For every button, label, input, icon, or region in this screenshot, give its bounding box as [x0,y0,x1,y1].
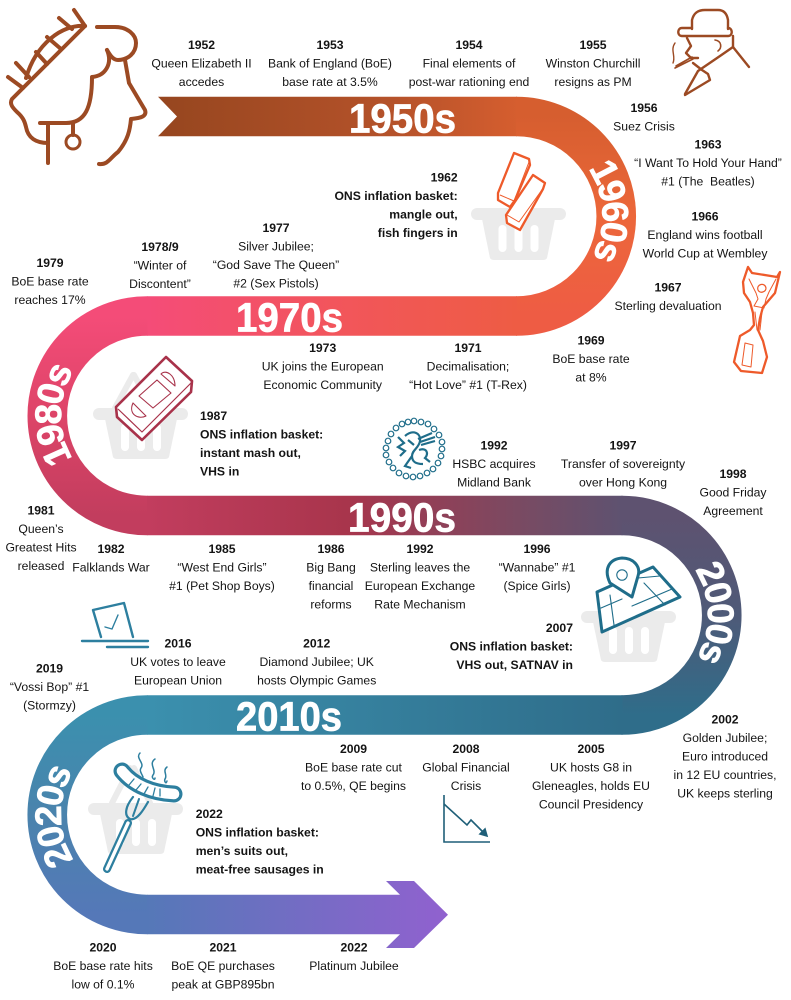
text: 1986: financial [309,579,353,593]
text: 1979: reaches 17% [14,293,86,307]
text: 1966: England wins football [647,228,763,242]
heading: 2010s: 2010s [236,694,342,740]
icon: VHS tape [116,357,192,440]
ribbon: 2000s curve [622,516,722,715]
text: 1981: released [18,559,64,573]
icon: steam [139,753,167,783]
text: 1987 basket note: 1987 [200,409,227,423]
text: 1985: #1 (Pet Shop Boys) [169,579,275,593]
text: 1969: BoE base rate [552,352,630,366]
text: 1997: over Hong Kong [579,476,667,490]
text: 1996: (Spice Girls) [503,579,571,593]
icon: sausage [122,771,174,796]
text: 2020: low of 0.1% [71,978,135,992]
text: 2021: peak at GBP895bn [172,978,274,992]
text: 1986: reforms [310,598,352,612]
icon: basket [471,208,566,260]
text: 1982: 1982 [97,542,125,556]
text: 1952: Queen Elizabeth II [151,57,252,71]
text: 1985: “West End Girls” [177,560,267,574]
text: 2016: European Union [134,674,222,688]
text: 1962 basket note: fish fingers in [378,226,458,240]
text: 1992 HSBC: HSBC acquires [452,457,536,471]
text: 1955: Winston Churchill [546,57,640,71]
text: 1955: resigns as PM [554,75,632,89]
text: 1963: 1963 [694,138,722,152]
text: 2022 basket note: ONS inflation basket: [196,826,319,840]
text: 2021: 2021 [209,941,237,955]
icon: basket [93,375,188,459]
text: 1952: 1952 [188,38,215,52]
heading: 1960s: 1960s [589,160,629,262]
text: 1978/9: “Winter of [134,258,187,272]
heading: 1980s: 1980s [34,364,72,466]
text: 1977: “God Save The Queen” [213,258,339,272]
text: 1955: 1955 [579,38,607,52]
text: 2022 Platinum Jubilee: Platinum Jubilee [309,959,399,973]
text: 1978/9: Discontent” [129,277,191,291]
text: 2002: UK keeps sterling [677,786,773,800]
text: 2005: UK hosts G8 in [550,760,632,774]
text: 1969: 1969 [577,334,605,348]
text: 1963: “I Want To Hold Your Hand” [634,156,782,170]
text: 2007 basket note: 2007 [546,621,573,635]
text: 1986: Big Bang [306,560,356,574]
text: 1962 basket note: mangle out, [389,208,458,222]
text: 1962 basket note: 1962 [431,171,458,185]
ribbon: 2020s curve [47,715,148,915]
text: 1966: 1966 [691,210,719,224]
text: 2009: to 0.5%, QE begins [301,779,406,793]
text: 1967: 1967 [654,280,682,294]
icon: ballot box [82,603,148,647]
text: 1962 basket note: ONS inflation basket: [334,189,458,203]
text: 1996: “Wannabe” #1 [499,560,576,574]
icon: Winston Churchill [673,10,749,95]
text: 2005: Council Presidency [539,798,644,812]
text: 1992 ERM: 1992 [406,542,434,556]
icon: World Cup trophy [734,267,780,373]
text: 1977: Silver Jubilee; [238,240,314,254]
ribbon: 1990s band [147,496,622,535]
text: 1997: 1997 [609,438,637,452]
text: 1954: Final elements of [423,57,516,71]
ribbon: 1980s curve [47,316,148,516]
text: 1953: base rate at 3.5% [282,75,378,89]
text: 1971: Decimalisation; [427,360,509,374]
text: 1973: Economic Community [263,378,383,392]
text: 1971: “Hot Love” #1 (T-Rex) [409,378,527,392]
text: 1981: Greatest Hits [5,541,77,555]
ribbon: winding decade timeline [47,97,722,948]
icon: basket with satnav map [581,558,680,662]
text: 1963: #1 (The Beatles) [661,174,755,188]
text: 1992 HSBC: 1992 [480,438,508,452]
text: 2002: Euro introduced [682,749,768,763]
text: 1954: 1954 [455,38,483,52]
text: 1998: Good Friday [699,486,767,500]
icon: basket [581,611,676,662]
text: 1987 basket note: instant mash out, [200,446,301,460]
text: 1987 basket note: VHS in [200,464,239,478]
text: 1978/9: 1978/9 [141,240,179,254]
text: 1982: Falklands War [72,560,150,574]
text: 1992 ERM: Sterling leaves the [370,560,470,574]
text: 1992 ERM: Rate Mechanism [374,598,466,612]
text: 1973: 1973 [309,341,336,355]
text: 2019: “Vossi Bop” #1 [10,680,89,694]
text: 1973: UK joins the European [262,360,384,374]
text: 2007 basket note: VHS out, SATNAV in [456,658,573,672]
text: 2016: UK votes to leave [130,655,226,669]
icon: fork [107,797,148,869]
text: 1966: World Cup at Wembley [643,246,768,260]
icon: HSBC griffin seal [383,418,445,480]
icon: basket with VHS tape [93,357,192,459]
text: 2012: Diamond Jubilee; UK [259,655,374,669]
text: 1956: 1956 [630,101,658,115]
icon: map sheet and pin [597,558,680,632]
icon: Queen profile with tiara [8,10,145,164]
ribbon: 2010s band [147,695,622,735]
icon: basket [88,768,183,854]
text: 2022 basket note: 2022 [196,807,223,821]
text: 1953: 1953 [316,38,344,52]
ribbon: 1950s band [158,97,517,136]
text: 1992 HSBC: Midland Bank [457,476,532,490]
heading: 1970s: 1970s [236,295,343,341]
text: 1971: 1971 [454,341,482,355]
text: 2002: Golden Jubilee; [683,731,767,745]
text: 2016: 2016 [164,637,192,651]
text: 2020: 2020 [89,941,117,955]
heading: 1990s: 1990s [348,494,456,540]
text: 1986: 1986 [317,542,345,556]
text: 1997: Transfer of sovereignty [561,457,686,471]
heading: 2000s: 2000s [695,562,734,663]
text: 2020: BoE base rate hits [53,959,153,973]
icon: falling chart [444,795,490,842]
text: 1977: 1977 [262,221,290,235]
text: 2008: Global Financial [422,760,510,774]
text: 1998: 1998 [719,467,747,481]
text: 1981: Queen’s [18,522,64,536]
icon: basket with sausage on a fork [88,753,183,869]
text: 2008: Crisis [451,779,481,793]
heading: 1950s: 1950s [349,96,456,142]
text: 1977: #2 (Sex Pistols) [233,276,319,290]
text: 2012: hosts Olympic Games [257,674,376,688]
text: 1953: Bank of England (BoE) [268,57,392,71]
text: 1956: Suez Crisis [613,120,675,134]
text: 1969: at 8% [575,370,607,384]
text: 2009: 2009 [340,742,367,756]
ribbon: 1970s band [147,296,517,336]
text: 2019: (Stormzy) [23,699,76,713]
text: 1952: accedes [179,75,224,89]
ribbon: final arrow [147,881,448,948]
text: 2005: 2005 [577,742,605,756]
text: 2002: 2002 [711,712,739,726]
icon: basket with fish fingers [471,153,566,260]
text: 2021: BoE QE purchases [171,959,275,973]
text: 1979: 1979 [36,256,64,270]
heading: 2020s: 2020s [34,766,74,868]
ribbon: 1960s curve [516,116,616,316]
text: 2007 basket note: ONS inflation basket: [450,640,573,654]
text: 2022 basket note: meat-free sausages in [196,862,324,876]
text: 2022 Platinum Jubilee: 2022 [340,941,368,955]
text: 1979: BoE base rate [11,275,89,289]
text: 1954: post-war rationing end [409,75,529,89]
text: 1981: 1981 [27,504,55,518]
icon: fish fingers [498,153,545,230]
text: 2019: 2019 [36,662,63,676]
text: 1996: 1996 [523,542,551,556]
text: 1987 basket note: ONS inflation basket: [200,428,323,442]
text: 2005: Gleneagles, holds EU [532,779,650,793]
text: 1998: Agreement [703,504,763,518]
text: 2012: 2012 [303,637,330,651]
text: 1985: 1985 [208,542,236,556]
text: 1992 ERM: European Exchange [365,579,475,593]
text: 2022 basket note: men’s suits out, [196,844,288,858]
text: 2008: 2008 [452,742,480,756]
text: 1967: Sterling devaluation [614,299,722,313]
text: 2009: BoE base rate cut [305,760,403,774]
text: 2002: in 12 EU countries, [674,768,776,782]
